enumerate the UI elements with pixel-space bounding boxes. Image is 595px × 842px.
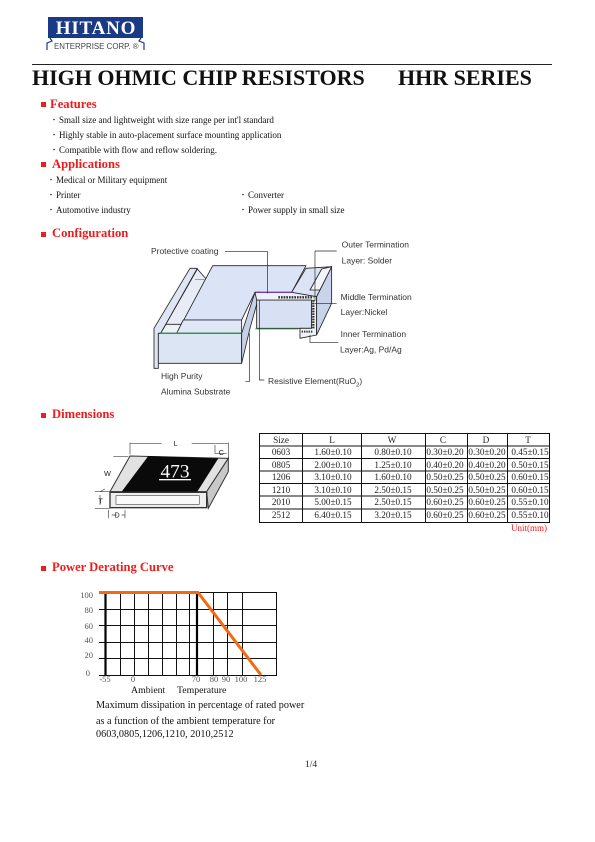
page number: 1/4 xyxy=(305,760,317,770)
chip dimension letters xyxy=(98,439,225,519)
table text: 0.55±0.10 xyxy=(511,510,549,520)
unit note: Unit(mm) xyxy=(511,523,547,533)
table text: 3.10±0.10 xyxy=(314,485,352,495)
x axis labels xyxy=(99,674,266,684)
table text: 0.50±0.15 xyxy=(511,460,549,470)
chip dimension letters: T xyxy=(98,496,103,505)
table text: Size xyxy=(273,435,289,445)
title: HHR SERIES xyxy=(398,65,532,90)
features list: Small size and lightweight with size range per int'l standard xyxy=(59,115,274,125)
applications list: Medical or Military equipment xyxy=(56,175,168,185)
diagram labels: Protective coating xyxy=(151,246,219,256)
features heading: Features xyxy=(50,97,97,111)
y axis labels: 100 xyxy=(80,590,93,600)
table text: 0.45±0.15 xyxy=(511,447,549,457)
x axis labels: 80 xyxy=(210,674,218,684)
table text: 0.55±0.10 xyxy=(511,497,549,507)
table text: C xyxy=(440,435,446,445)
chip dimension letters: D xyxy=(114,510,120,519)
diagram labels: Inner Termination xyxy=(341,329,406,339)
x axis labels: 125 xyxy=(254,674,266,684)
dimensions heading: Dimensions xyxy=(52,407,114,421)
diagram labels: Alumina Substrate xyxy=(161,386,231,396)
table text: 0.60±0.25 xyxy=(426,497,464,507)
table text: 2010 xyxy=(272,497,291,507)
diagram labels: 2 xyxy=(356,382,359,388)
table text: 2.50±0.15 xyxy=(374,485,412,495)
table text: 0.80±0.10 xyxy=(374,447,412,457)
chart caption: as a function of the ambient temperature for xyxy=(96,716,276,727)
table text: 0.60±0.25 xyxy=(468,510,506,520)
x axis labels: 70 xyxy=(192,674,200,684)
derating curve xyxy=(99,592,261,675)
applications list: Automotive industry xyxy=(56,205,131,215)
diagram labels: Resistive Element(RuO xyxy=(268,376,356,386)
logo: HITANO xyxy=(56,18,136,39)
diagram labels: Layer: Solder xyxy=(342,255,392,265)
table text: 0.40±0.20 xyxy=(468,460,506,470)
y axis labels: 0 xyxy=(86,668,90,678)
chip drawing xyxy=(95,439,228,519)
features list: Compatible with flow and reflow soldering. xyxy=(59,145,217,155)
y axis labels: 60 xyxy=(84,621,93,631)
diagram labels: Layer:Nickel xyxy=(341,307,387,317)
table text: 5.00±0.15 xyxy=(314,497,352,507)
applications heading: Applications xyxy=(52,157,120,171)
axis title: Temperature xyxy=(177,685,227,696)
table text: 0.60±0.15 xyxy=(511,485,549,495)
table text: 0.30±0.20 xyxy=(426,447,464,457)
title: HIGH OHMIC CHIP RESISTORS xyxy=(32,65,365,90)
x axis labels: 90 xyxy=(222,674,230,684)
table text: D xyxy=(483,435,490,445)
table text: 1.25±0.10 xyxy=(374,460,412,470)
table text: 0603 xyxy=(272,447,291,457)
logo: ENTERPRISE CORP. ® xyxy=(54,42,139,51)
table text: 0.50±0.25 xyxy=(468,485,506,495)
diagram labels: Outer Termination xyxy=(342,240,409,250)
x axis labels: 0 xyxy=(131,674,135,684)
table text: 1.60±0.10 xyxy=(314,447,352,457)
table text: 1206 xyxy=(272,472,291,482)
diagram labels: Middle Termination xyxy=(341,292,412,302)
table text: 0.30±0.20 xyxy=(468,447,506,457)
applications list: Printer xyxy=(56,190,80,200)
diagram labels: ) xyxy=(359,376,362,386)
logo xyxy=(47,17,144,51)
features list: Highly stable in auto-placement surface mounting application xyxy=(59,130,282,140)
table text xyxy=(272,435,549,520)
table text: 0.60±0.15 xyxy=(511,472,549,482)
table text: 1.60±0.10 xyxy=(374,472,412,482)
chip dimension letters: L xyxy=(174,439,178,448)
chart caption xyxy=(96,700,305,740)
table text: 0.60±0.25 xyxy=(468,497,506,507)
table text: 0.50±0.25 xyxy=(426,472,464,482)
title xyxy=(32,65,532,90)
applications list xyxy=(50,175,344,215)
configuration diagram xyxy=(151,240,412,396)
chip dimension letters: W xyxy=(104,469,111,478)
table text: 0.60±0.25 xyxy=(426,510,464,520)
table text: 0.50±0.25 xyxy=(426,485,464,495)
y axis labels xyxy=(80,590,93,678)
configuration heading: Configuration xyxy=(52,226,128,240)
y axis labels: 80 xyxy=(84,605,93,615)
table text: T xyxy=(525,435,531,445)
chip dimension letters: C xyxy=(219,448,225,457)
applications list: Power supply in small size xyxy=(248,205,344,215)
y axis labels: 40 xyxy=(84,635,93,645)
features list xyxy=(53,115,282,155)
chart caption: Maximum dissipation in percentage of rated power xyxy=(96,700,305,711)
table text: 1210 xyxy=(272,485,291,495)
dimensions table xyxy=(259,433,550,522)
table text: L xyxy=(329,435,335,445)
axis title xyxy=(131,685,227,696)
diagram labels: Layer:Ag, Pd/Ag xyxy=(340,344,402,354)
table text: 3.10±0.10 xyxy=(314,472,352,482)
table text: 6.40±0.15 xyxy=(314,510,352,520)
marking 473: 473 xyxy=(160,461,189,482)
power derating chart xyxy=(80,590,277,696)
x axis labels: -55 xyxy=(99,674,111,684)
chart caption: 0603,0805,1206,1210, 2010,2512 xyxy=(96,729,234,740)
table text: 3.20±0.15 xyxy=(374,510,412,520)
table text: W xyxy=(388,435,397,445)
table text: 0805 xyxy=(272,460,291,470)
table text: 0.50±0.25 xyxy=(468,472,506,482)
table text: 0.40±0.20 xyxy=(426,460,464,470)
table text: 2.50±0.15 xyxy=(374,497,412,507)
table text: 2512 xyxy=(272,510,291,520)
diagram labels xyxy=(151,240,412,396)
y axis labels: 20 xyxy=(84,650,93,660)
axis title: Ambient xyxy=(131,685,166,696)
table text: 2.00±0.10 xyxy=(314,460,352,470)
x axis labels: 100 xyxy=(235,674,247,684)
diagram labels: High Purity xyxy=(161,371,203,381)
power derating heading: Power Derating Curve xyxy=(52,560,174,574)
applications list: Converter xyxy=(248,190,284,200)
